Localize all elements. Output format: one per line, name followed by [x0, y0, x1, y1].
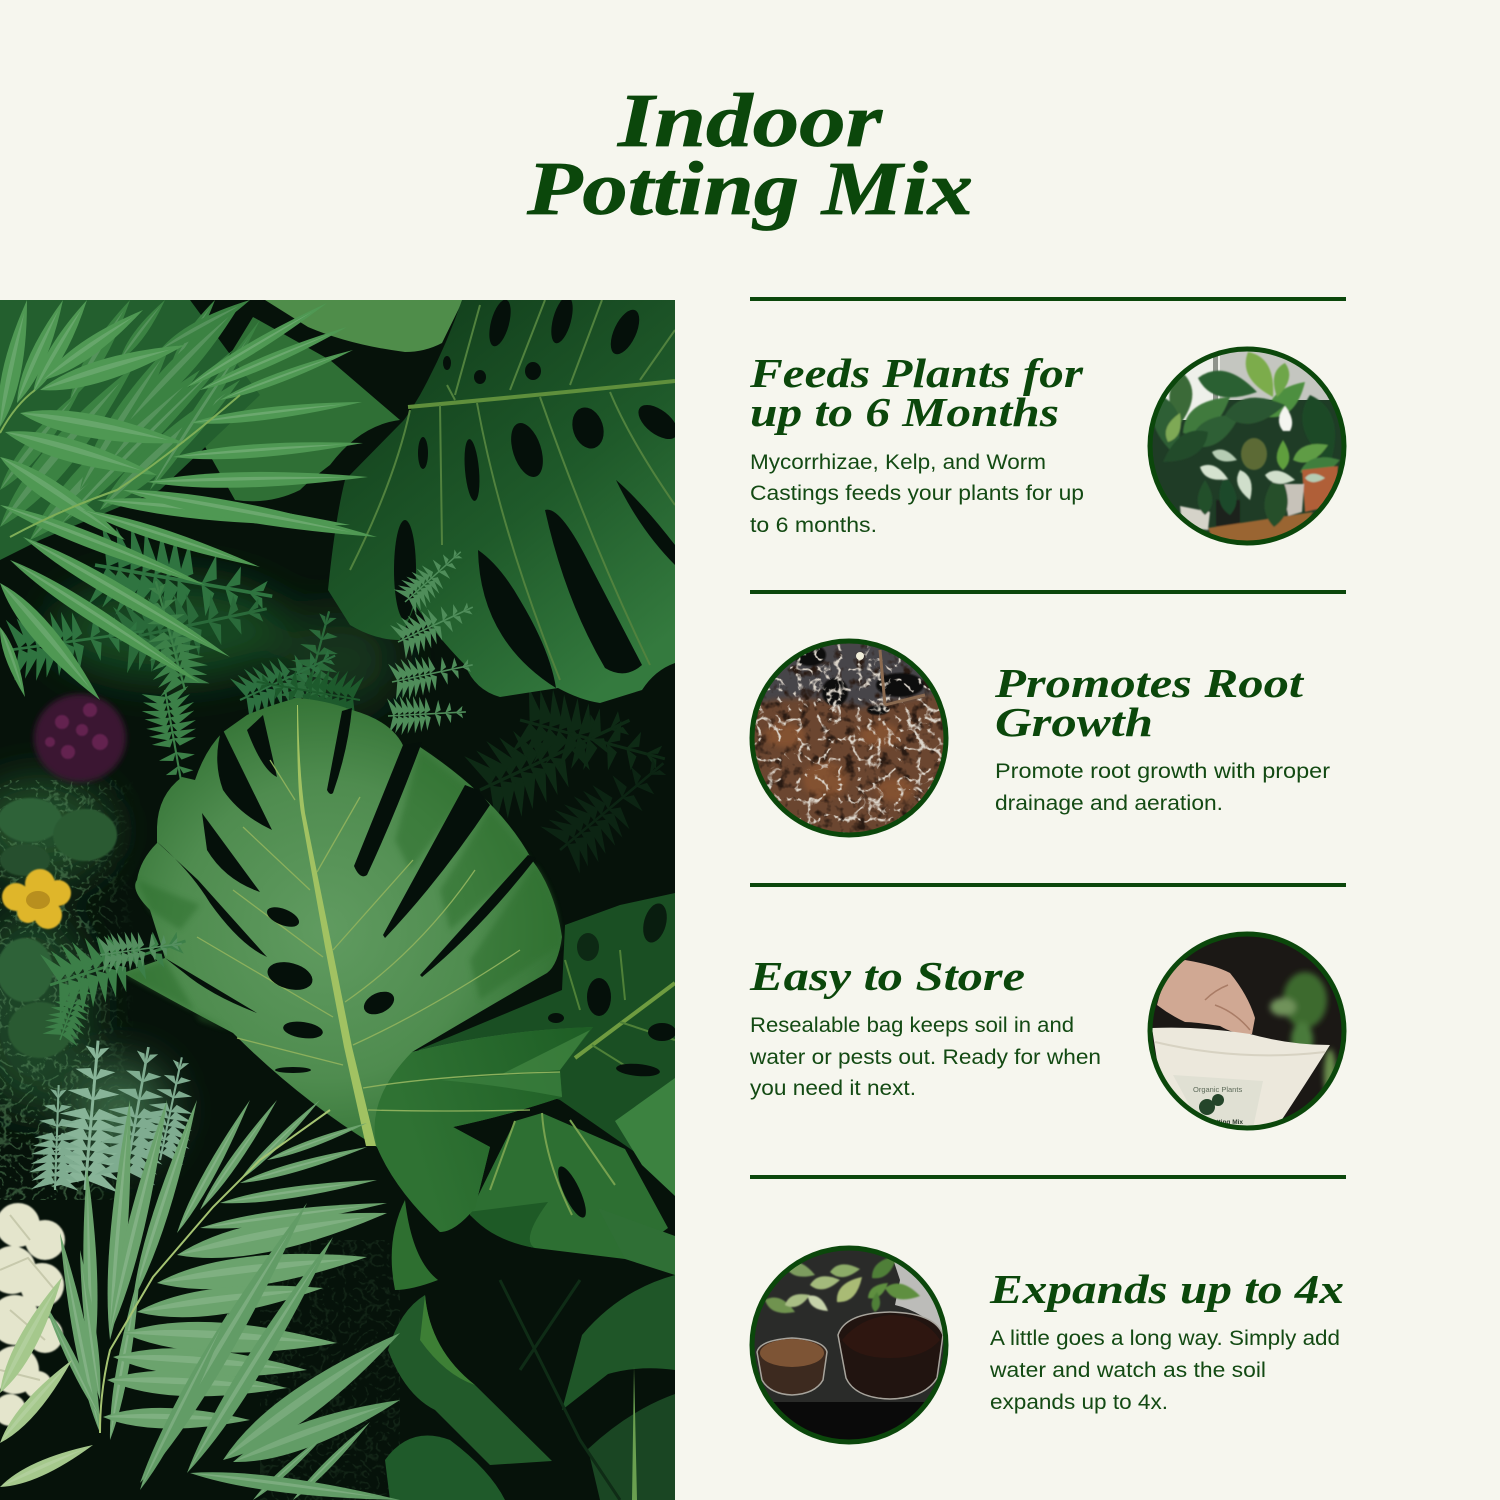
- bottom centre leaves: [385, 1200, 552, 1500]
- midrib: [297, 705, 376, 1146]
- body text: [749, 1014, 1101, 1100]
- heading: Promotes Root: [994, 660, 1305, 706]
- feature: promotes root growth: [750, 640, 1330, 840]
- leaf cuts: [155, 708, 536, 1013]
- body text: Mycorrhizae, Kelp, and Worm: [750, 451, 1046, 474]
- body text: expands up to 4x.: [990, 1391, 1168, 1414]
- body text: [989, 1327, 1340, 1414]
- photo: tropical foliage: [0, 294, 685, 1500]
- feature: expands up to 4x: [750, 1246, 1344, 1452]
- photo: resealable bag: [1147, 931, 1347, 1134]
- purple kale: [34, 694, 126, 782]
- body text: [750, 451, 1084, 537]
- pale leaf top centre: [265, 300, 463, 352]
- body text: you need it next.: [750, 1077, 916, 1100]
- title: [526, 79, 973, 231]
- lower right front leaf lobes: [468, 1078, 675, 1500]
- heading: Growth: [995, 699, 1153, 745]
- fern clusters under top palm: [6, 528, 473, 779]
- top right monstera leaf: [328, 294, 684, 703]
- lower right back monstera leaf: [418, 893, 675, 1151]
- body text: Castings feeds your plants for up: [750, 482, 1084, 505]
- main monstera leaf: [123, 698, 593, 1232]
- leaf holes and slits: [394, 294, 684, 688]
- body text: Promote root growth with proper: [995, 760, 1330, 783]
- body text: water or pests out. Ready for when: [749, 1046, 1101, 1069]
- heading: [994, 660, 1305, 745]
- heading: Easy to Store: [749, 953, 1025, 999]
- photo: roots: [750, 640, 950, 840]
- photo: resealable bag: Organic Plants: [1193, 1085, 1242, 1094]
- left edge plants and flower: [0, 798, 208, 1426]
- feature: easy to store: [749, 931, 1347, 1134]
- feature: feeds plants: [749, 346, 1347, 546]
- top left palm front leaflets: [0, 296, 379, 707]
- body text: A little goes a long way. Simply add: [990, 1327, 1340, 1350]
- title: Potting Mix: [526, 147, 973, 231]
- bottom left palm frond: [0, 1097, 409, 1500]
- body text: drainage and aeration.: [995, 792, 1223, 815]
- body text: to 6 months.: [750, 514, 877, 537]
- heading: [749, 350, 1084, 435]
- side veins: [197, 760, 560, 1111]
- body text: Resealable bag keeps soil in and: [750, 1014, 1074, 1037]
- photo: resealable bag: Potting Mix: [1208, 1119, 1243, 1126]
- body text: water and watch as the soil: [989, 1359, 1266, 1382]
- leaf behind palm: [190, 317, 400, 501]
- photo: houseplants: [1147, 346, 1347, 546]
- photo: soil bowls: [750, 1246, 950, 1452]
- title: Indoor: [617, 79, 884, 163]
- top left palm back layer: [0, 294, 266, 560]
- divider rules: [750, 297, 1346, 1179]
- heading: up to 6 Months: [750, 389, 1059, 435]
- body text: [995, 760, 1330, 815]
- heading: Feeds Plants for: [749, 350, 1084, 396]
- leaf holes: [264, 903, 398, 1073]
- heading: Expands up to 4x: [989, 1266, 1344, 1312]
- dark undergrowth: [0, 580, 685, 1500]
- shaded lobe tips: [125, 750, 560, 1030]
